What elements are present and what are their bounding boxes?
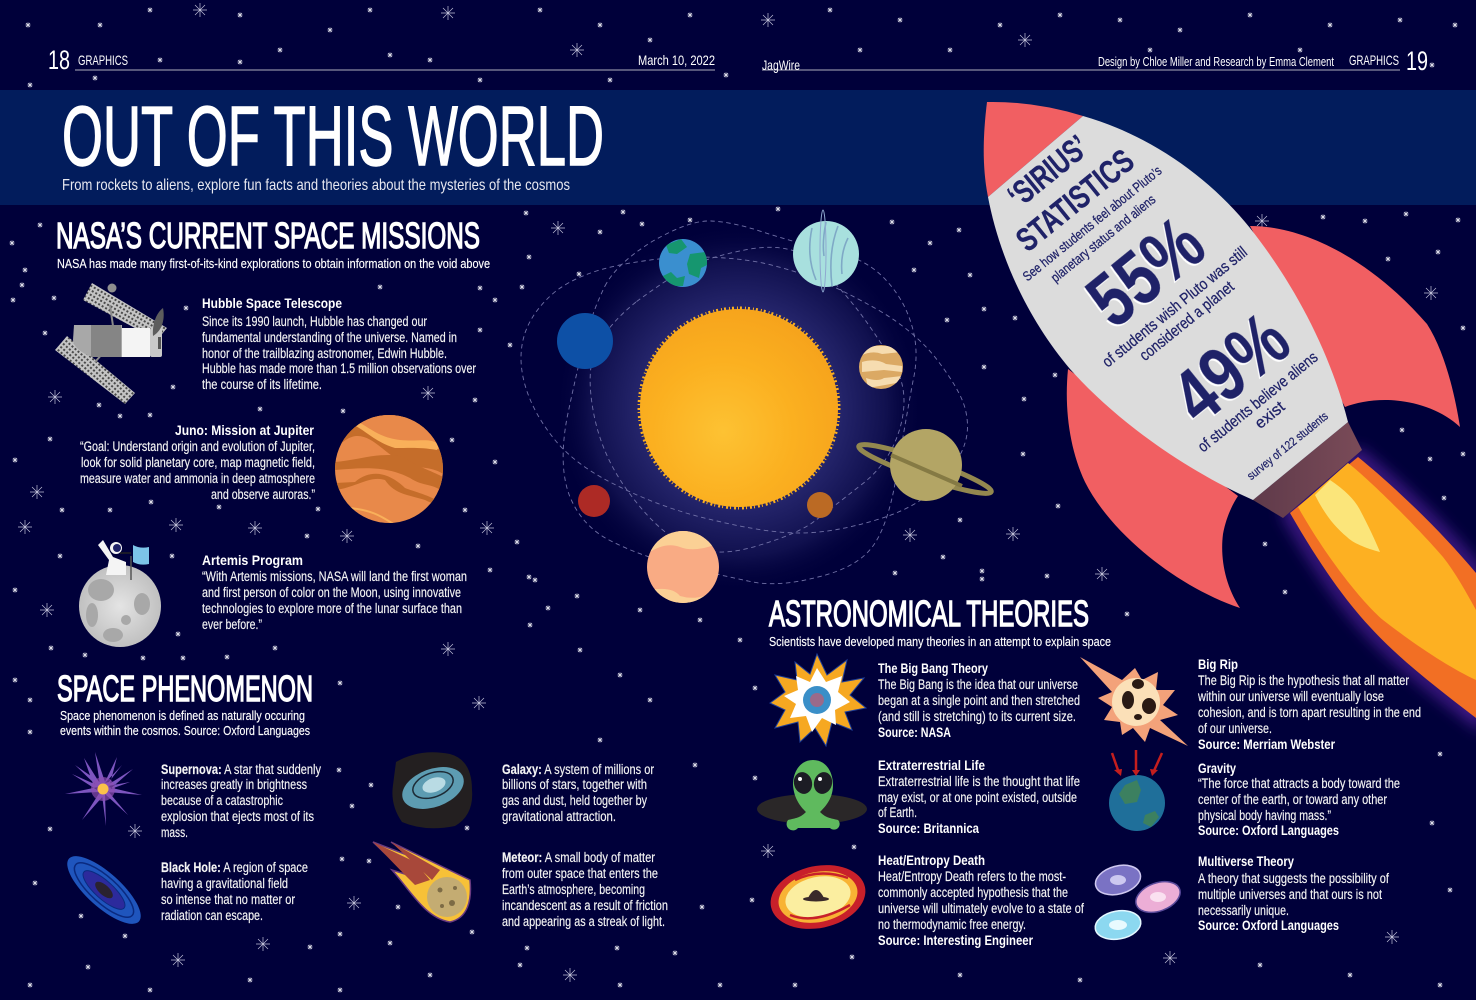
header band: page folio, section and credits: March 10, 2022 xyxy=(638,52,715,68)
text: meteor: Earth’s atmosphere, becoming xyxy=(502,882,645,897)
text: hubble: Since its 1990 launch, Hubble has changed our xyxy=(202,314,427,329)
text: hubble: honor of the trailblazing astronomer, Edwin Hubble. xyxy=(202,346,447,361)
header band: page folio, section and credits: JagWire xyxy=(762,57,800,73)
text: heat death xyxy=(878,852,1084,948)
text: heat death: Heat/Entropy Death refers to the most- xyxy=(878,869,1066,884)
text: black hole: radiation can escape. xyxy=(161,908,263,923)
text: big bang: Source: NASA xyxy=(878,724,951,740)
text: gravity: “The force that attracts a body toward the xyxy=(1198,776,1400,791)
icon: supernova xyxy=(65,752,142,826)
solar system diagram xyxy=(521,210,994,608)
text: artemis xyxy=(202,552,467,632)
intro: events within the cosmos. Source: Oxford Languages xyxy=(60,723,310,738)
nozzle xyxy=(1253,422,1362,518)
text: big bang: began at a single point and then stretched xyxy=(878,693,1080,708)
text: hubble: Hubble has made more than 1.5 million observations over xyxy=(202,361,476,376)
planet: earth xyxy=(659,239,709,287)
icon: multiverse xyxy=(1092,861,1184,943)
text: juno: Juno: Mission at Jupiter xyxy=(175,422,314,438)
text: heat death: Source: Interesting Engineer xyxy=(878,932,1033,948)
intro xyxy=(60,708,310,738)
text: artemis: “With Artemis missions, NASA will land the first woman xyxy=(202,569,467,584)
rocket text: exist xyxy=(1252,398,1289,432)
text: meteor: and appearing as a streak of light. xyxy=(502,914,665,929)
text: galaxy: billions of stars, together with xyxy=(502,777,647,792)
planet: tan banded xyxy=(859,345,903,389)
icon: meteor xyxy=(373,842,470,922)
orbit paths xyxy=(521,221,968,584)
icon: jupiter xyxy=(335,415,445,525)
text: extraterrestrial life: may exist, or at one point existed, outside xyxy=(878,790,1077,805)
sun xyxy=(639,308,839,508)
planet: saturn xyxy=(856,429,994,501)
rocket text: planetary status and aliens xyxy=(1048,192,1159,285)
header band: page folio, section and credits: 19 xyxy=(1406,46,1428,76)
flame core xyxy=(1315,480,1380,552)
text: multiverse: Multiverse Theory xyxy=(1198,853,1294,869)
text: big rip: The Big Rip is the hypothesis that all matter xyxy=(1198,673,1409,688)
text: multiverse xyxy=(1198,853,1389,933)
icon: hubble telescope xyxy=(55,283,167,404)
planet: uranus xyxy=(793,210,859,292)
text: big rip: of our universe. xyxy=(1198,721,1272,736)
text: galaxy: gas and dust, held together by xyxy=(502,793,647,808)
rocket text: of students believe aliens xyxy=(1195,349,1321,456)
text: hubble: Hubble Space Telescope xyxy=(202,295,342,311)
text: gravity: center of the earth, or toward any other xyxy=(1198,792,1387,807)
text: artemis: Artemis Program xyxy=(202,552,303,568)
text: galaxy: gravitational attraction. xyxy=(502,809,616,824)
text: black hole: Black Hole: A region of space xyxy=(161,860,308,875)
icon: astronaut on moon xyxy=(79,540,161,647)
icon: heat death xyxy=(765,857,871,937)
stat: 55%: 55% xyxy=(1071,200,1220,344)
subtitle: From rockets to aliens, explore fun facts and theories about the mysteries of the cosmos xyxy=(62,177,570,194)
text: big rip: cohesion, and is torn apart resulting in the end xyxy=(1198,705,1421,720)
text: black hole xyxy=(161,860,308,923)
icon: black hole xyxy=(58,846,150,934)
text: supernova xyxy=(161,762,321,840)
rocket text: ‘SIRIUS’ xyxy=(1000,128,1095,214)
text: gravity: Gravity xyxy=(1198,760,1236,776)
icon: galaxy xyxy=(392,752,472,828)
planet: mars xyxy=(578,485,610,517)
text: juno: measure water and ammonia in deep atmosphere xyxy=(80,471,315,486)
nose xyxy=(984,102,1083,197)
text: heat death: commonly accepted hypothesis that the xyxy=(878,885,1068,900)
intro: NASA has made many first-of-its-kind explorations to obtain information on the void above xyxy=(57,256,490,271)
header band: page folio, section and credits: Design by Chloe Miller and Research by Emma Clement xyxy=(1098,54,1334,69)
heading: NASA’S CURRENT SPACE MISSIONS xyxy=(56,215,480,256)
text: supernova: because of a catastrophic xyxy=(161,793,283,808)
section: space phenomenon xyxy=(57,668,668,934)
text: gravity xyxy=(1198,760,1400,838)
flame outer xyxy=(1290,457,1476,718)
text: big bang: The Big Bang Theory xyxy=(878,660,988,676)
text: hubble xyxy=(202,295,476,392)
text: multiverse: Source: Oxford Languages xyxy=(1198,917,1339,933)
text: galaxy: Galaxy: A system of millions or xyxy=(502,762,654,777)
text: big rip: within our universe will eventually lose xyxy=(1197,689,1384,704)
text: hubble: fundamental understanding of the universe. Named in xyxy=(202,330,457,345)
text: meteor: incandescent as a result of friction xyxy=(502,898,668,913)
text: gravity: Source: Oxford Languages xyxy=(1198,822,1339,838)
text: black hole: having a gravitational field xyxy=(161,876,288,891)
title banner xyxy=(0,89,1476,205)
text: meteor xyxy=(502,850,668,929)
text: meteor: from outer space that enters the xyxy=(502,866,658,881)
right fin xyxy=(1250,226,1460,427)
text: extraterrestrial life xyxy=(878,757,1080,836)
title: OUT OF THIS WORLD xyxy=(62,89,604,183)
text: heat death: no thermodynamic free energy. xyxy=(878,917,1026,932)
header band: page folio, section and credits xyxy=(48,45,1428,76)
rocket text: considered a planet xyxy=(1137,278,1238,365)
rocket text: STATISTICS xyxy=(1009,142,1141,258)
flame inner xyxy=(1298,463,1476,680)
intro: Space phenomenon is defined as naturally occuring xyxy=(60,708,305,723)
flame glow xyxy=(1290,457,1476,718)
left fin xyxy=(1067,369,1240,608)
header band: page folio, section and credits: GRAPHICS xyxy=(1349,52,1399,68)
text: artemis: ever before.” xyxy=(202,617,262,632)
text: heat death: universe will ultimately evolve to a state of xyxy=(878,901,1084,916)
rocket text xyxy=(1000,128,1331,483)
planet: venus xyxy=(647,531,719,603)
text: big bang xyxy=(878,660,1080,740)
section: NASA's current space missions xyxy=(55,215,490,647)
icon: alien xyxy=(757,760,867,830)
text: extraterrestrial life: Source: Britannica xyxy=(878,820,979,836)
planet: mercury xyxy=(807,492,833,518)
icon: big rip xyxy=(1080,657,1188,746)
text: supernova: Supernova: A star that suddenly xyxy=(161,762,321,777)
text: hubble: the course of its lifetime. xyxy=(202,377,322,392)
rocket infographic: 'Sirius' statistics xyxy=(984,102,1476,718)
text: artemis: technologies to explore more of the lunar surface than xyxy=(202,601,462,616)
text: juno: look for solid planetary core, map magnetic field, xyxy=(81,455,315,470)
heading: SPACE PHENOMENON xyxy=(57,668,313,709)
text: extraterrestrial life: Extraterrestrial life is the thought that life xyxy=(878,774,1080,789)
intro: Scientists have developed many theories in an attempt to explain space xyxy=(769,634,1111,649)
header band: page folio, section and credits: GRAPHICS xyxy=(78,52,128,68)
text: multiverse: A theory that suggests the possibility of xyxy=(1198,871,1389,886)
stat: 49%: 49% xyxy=(1156,296,1305,440)
heading: ASTRONOMICAL THEORIES xyxy=(769,593,1089,634)
icon: gravity xyxy=(1109,750,1165,831)
text: multiverse: multiple universes and that ours is not xyxy=(1198,887,1382,902)
text: black hole: so intense that no matter or xyxy=(161,892,295,907)
text: extraterrestrial life: of Earth. xyxy=(878,805,917,820)
icon: big bang xyxy=(770,654,866,746)
text: big rip: Big Rip xyxy=(1198,656,1238,672)
text: galaxy xyxy=(502,762,654,824)
text: heat death: Heat/Entropy Death xyxy=(878,852,985,868)
text: supernova: explosion that ejects most of its xyxy=(161,809,314,824)
section: astronomical theories xyxy=(757,593,1421,948)
text: big bang: (and still is stretching) to its current size. xyxy=(878,709,1076,724)
text: big rip: Source: Merriam Webster xyxy=(1198,736,1335,752)
header band: page folio, section and credits: 18 xyxy=(48,45,70,75)
body xyxy=(988,116,1348,500)
text: multiverse: necessarily unique. xyxy=(1198,903,1289,918)
text: juno: and observe auroras.” xyxy=(211,487,315,502)
text: supernova: mass. xyxy=(161,825,188,840)
rocket text: of students wish Pluto was still xyxy=(1099,244,1251,371)
text: meteor: Meteor: A small body of matter xyxy=(502,850,655,865)
text: artemis: and first person of color on the Moon, using innovative xyxy=(202,585,461,600)
text: juno xyxy=(80,422,315,502)
planet: neptune xyxy=(557,313,613,369)
rocket text: See how students feel about Pluto’s xyxy=(1020,163,1165,284)
text: supernova: increases greatly in brightness xyxy=(161,777,307,792)
text: big rip xyxy=(1197,656,1421,752)
text: juno: “Goal: Understand origin and evolution of Jupiter, xyxy=(80,439,315,454)
text: big bang: The Big Bang is the idea that our universe xyxy=(878,677,1078,692)
survey note: survey of 122 students xyxy=(1244,409,1331,483)
text: extraterrestrial life: Extraterrestrial Life xyxy=(878,757,985,773)
text: gravity: physical body having mass.” xyxy=(1198,808,1331,823)
